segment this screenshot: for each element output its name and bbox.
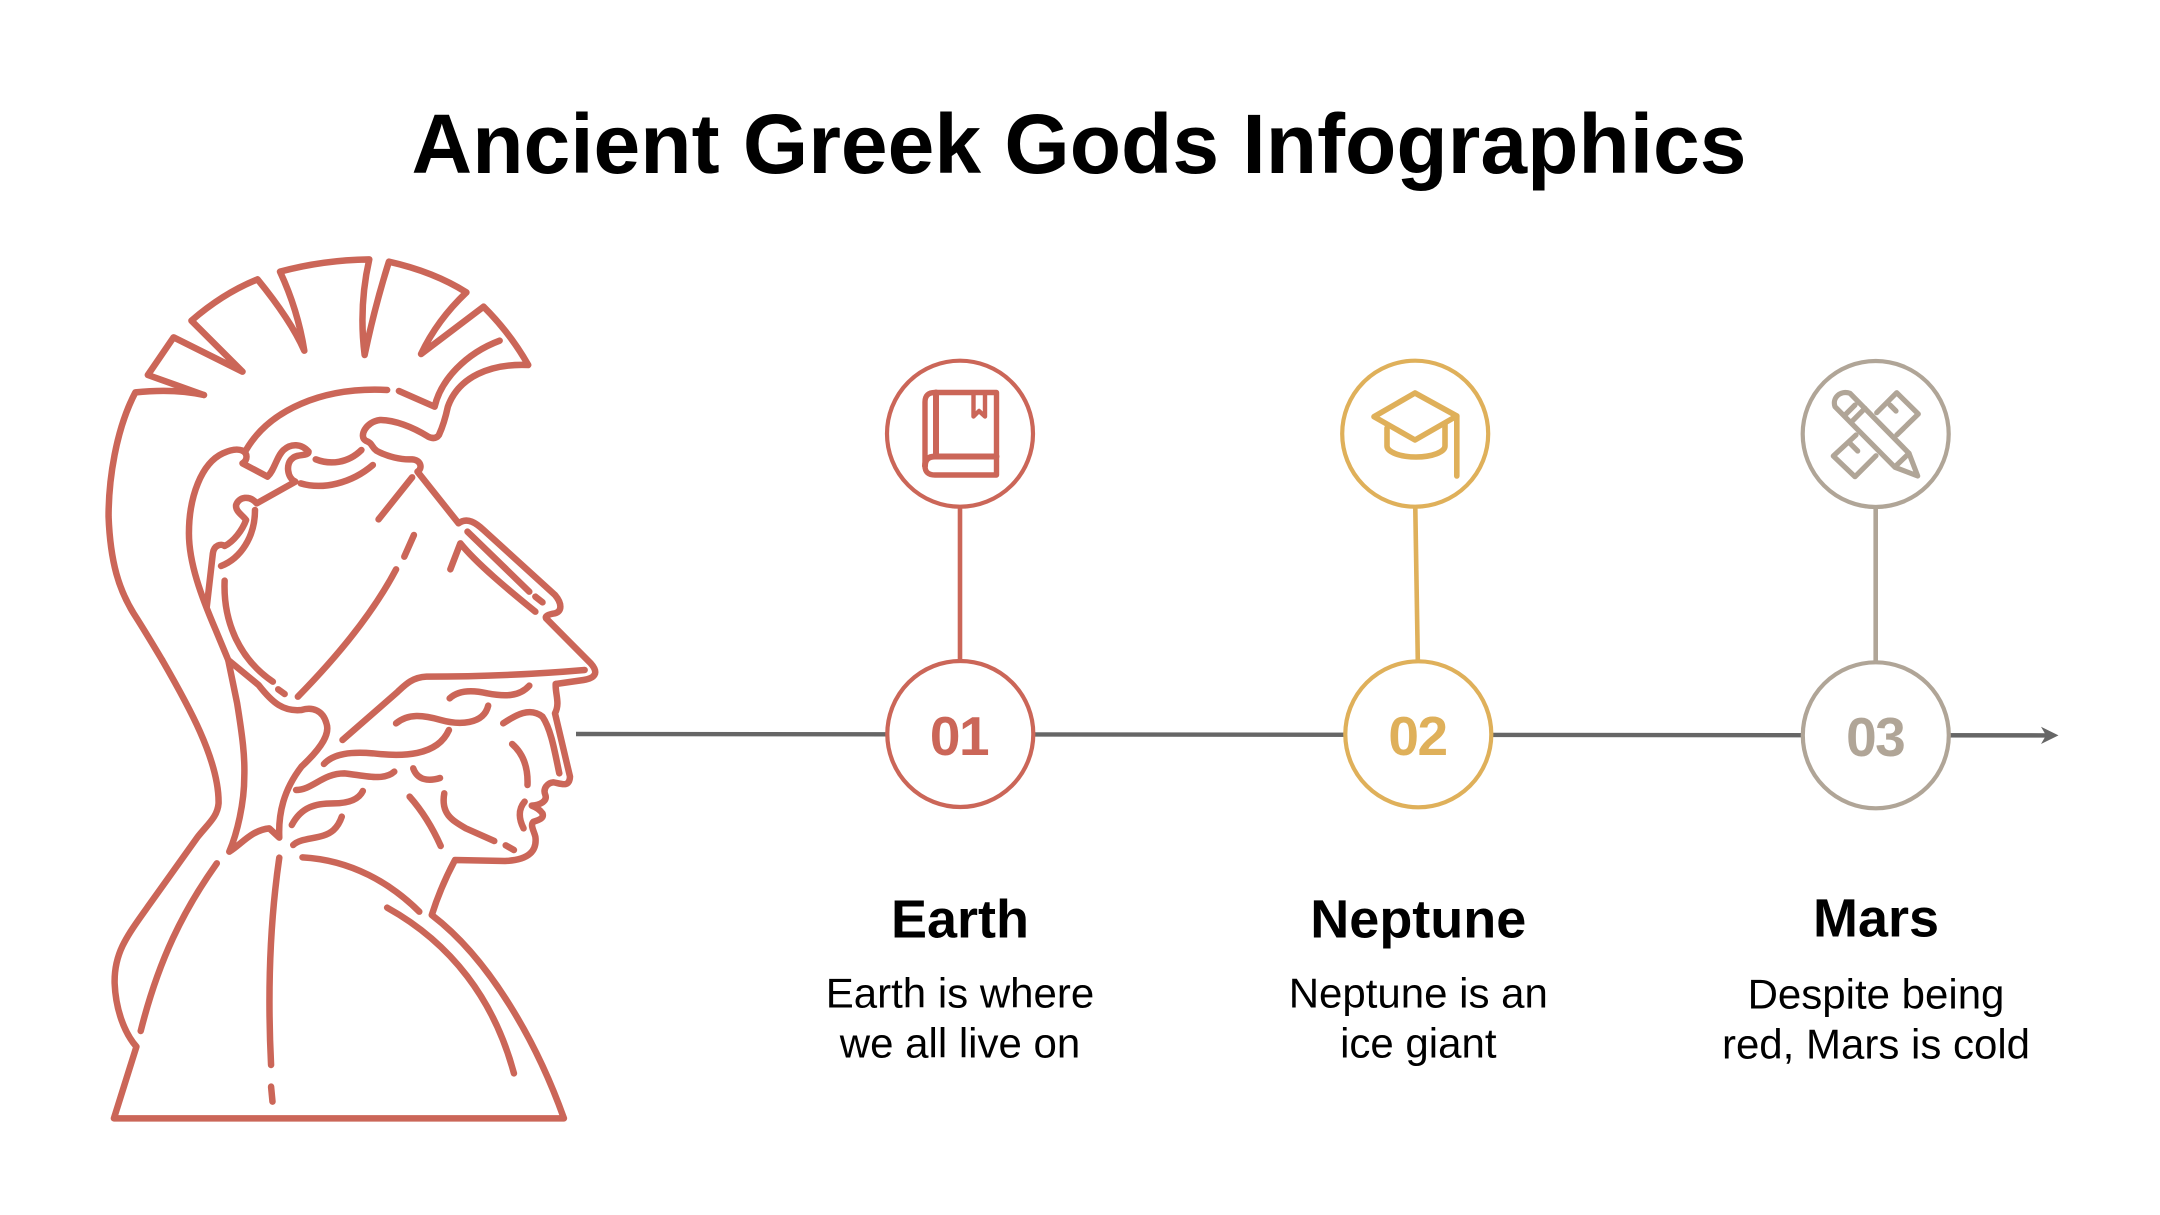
- text block: Mars: Despite being: [1748, 970, 2004, 1017]
- step 02 node: 02: [1388, 705, 1447, 767]
- step 03 node: 03: [1846, 706, 1904, 768]
- text block: Neptune: Neptune is an: [1289, 970, 1548, 1017]
- connector: tools to 03: [1873, 508, 1878, 661]
- icon: pencil and ruler: [1833, 393, 1918, 477]
- step 01 node: 01: [930, 705, 989, 767]
- text block: Earth: Earth is where: [826, 970, 1094, 1017]
- icon: book: [925, 392, 996, 475]
- timeline arrow: [576, 727, 2058, 744]
- text block: Neptune: [1289, 890, 1548, 1067]
- text block: Mars: Mars: [1813, 889, 1939, 949]
- text block: Neptune: Neptune: [1310, 890, 1526, 950]
- step 02 node: [1345, 661, 1491, 807]
- title: Ancient Greek Gods Infographics: [412, 97, 1746, 191]
- text block: Earth: [826, 890, 1094, 1067]
- connector: book to 01: [958, 508, 962, 660]
- text block: Neptune: ice giant: [1340, 1020, 1497, 1067]
- text block: Earth: Earth: [891, 890, 1029, 950]
- text block: Mars: [1722, 889, 2030, 1068]
- icon circle: graduation cap: [1342, 361, 1488, 507]
- icon: graduation cap: [1374, 393, 1457, 476]
- icon circle: pencil and ruler: [1803, 361, 1949, 507]
- step 03 node: [1803, 662, 1949, 808]
- connector: cap to 02: [1415, 508, 1418, 660]
- text block: Earth: we all live on: [839, 1020, 1080, 1067]
- text block: Mars: red, Mars is cold: [1722, 1021, 2030, 1068]
- illustration: Greek warrior helmet profile: [109, 259, 595, 1118]
- step 01 node: [887, 661, 1033, 807]
- icon circle: book: [887, 361, 1033, 507]
